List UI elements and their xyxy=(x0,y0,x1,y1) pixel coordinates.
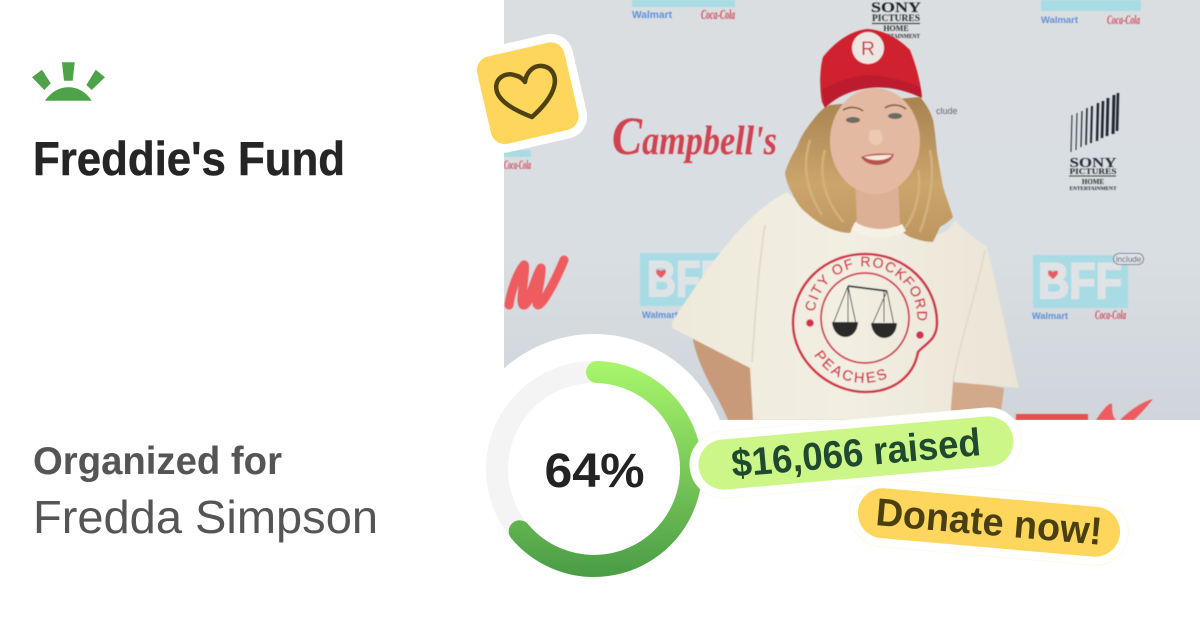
sticker: yellow heart card xyxy=(474,40,581,147)
backdrop sponsor logos: BFF xyxy=(647,251,725,307)
backdrop sponsor logos: HOME xyxy=(1082,178,1104,186)
percent label: 64% xyxy=(544,445,644,498)
progress ring xyxy=(497,372,691,566)
backdrop sponsor logos: ENTERTAINMENT xyxy=(1070,187,1117,192)
photo: woman at step-and-repeat backdrop xyxy=(504,0,1200,420)
backdrop sponsor logos: include xyxy=(1116,255,1142,264)
red cap xyxy=(820,29,922,108)
woman: R xyxy=(861,39,875,60)
title: Freddie's Fund xyxy=(33,132,345,185)
backdrop sponsor logos: Coca-Cola xyxy=(1107,12,1140,27)
eyes and mouth xyxy=(846,117,860,123)
backdrop sponsor logos: clude xyxy=(936,106,958,116)
backdrop sponsor logos: Campbell's xyxy=(612,106,777,166)
shirt emblem: PEACHES xyxy=(814,350,887,384)
hair xyxy=(785,97,953,242)
shirt folds xyxy=(752,225,985,382)
pill: amount raised: $16,066 raised xyxy=(730,421,982,486)
backdrop sponsor logos: ENTERTAINMENT xyxy=(872,34,920,40)
neck xyxy=(855,186,900,230)
backdrop sponsor logos: SONY xyxy=(871,0,921,16)
backdrop sponsor logos: Walmart xyxy=(632,10,673,21)
left arm xyxy=(692,335,757,420)
progress ring white backing xyxy=(459,334,729,604)
collar xyxy=(850,222,906,233)
organizer name: Fredda Simpson xyxy=(33,491,378,543)
logo icon: green sun xyxy=(32,62,105,101)
shirt emblem xyxy=(791,252,939,394)
backdrop sponsor logos: Walmart xyxy=(1032,311,1068,321)
woman xyxy=(672,28,1019,420)
backdrop sponsor logos: HOME xyxy=(883,24,909,33)
button: donate now: Donate now! xyxy=(874,491,1104,554)
backdrop sponsor logos: PICTURES xyxy=(872,13,920,23)
hair strands xyxy=(806,140,932,232)
backdrop sponsor logos: Walmart xyxy=(642,310,678,320)
face xyxy=(830,88,920,194)
backdrop sponsor logos: Walmart xyxy=(1041,15,1078,25)
icon: heart xyxy=(496,66,555,117)
backdrop sponsor logos: Coca-Cola xyxy=(1095,307,1126,322)
backdrop sponsor logos: BFF xyxy=(1038,253,1122,309)
backdrop sponsor logos: SONY xyxy=(1070,156,1116,171)
shirt emblem: CITY OF ROCKFORD xyxy=(805,256,928,321)
backdrop sponsor logos: Coca-Cola xyxy=(701,8,735,23)
right arm xyxy=(950,382,1004,410)
backdrop sponsor logos: Coca-Cola xyxy=(504,157,531,172)
backdrop sponsor logos xyxy=(504,0,1153,420)
organizer label: Organized for xyxy=(33,440,282,483)
t-shirt xyxy=(672,192,1019,420)
backdrop sponsor logos: PICTURES xyxy=(1070,167,1117,176)
